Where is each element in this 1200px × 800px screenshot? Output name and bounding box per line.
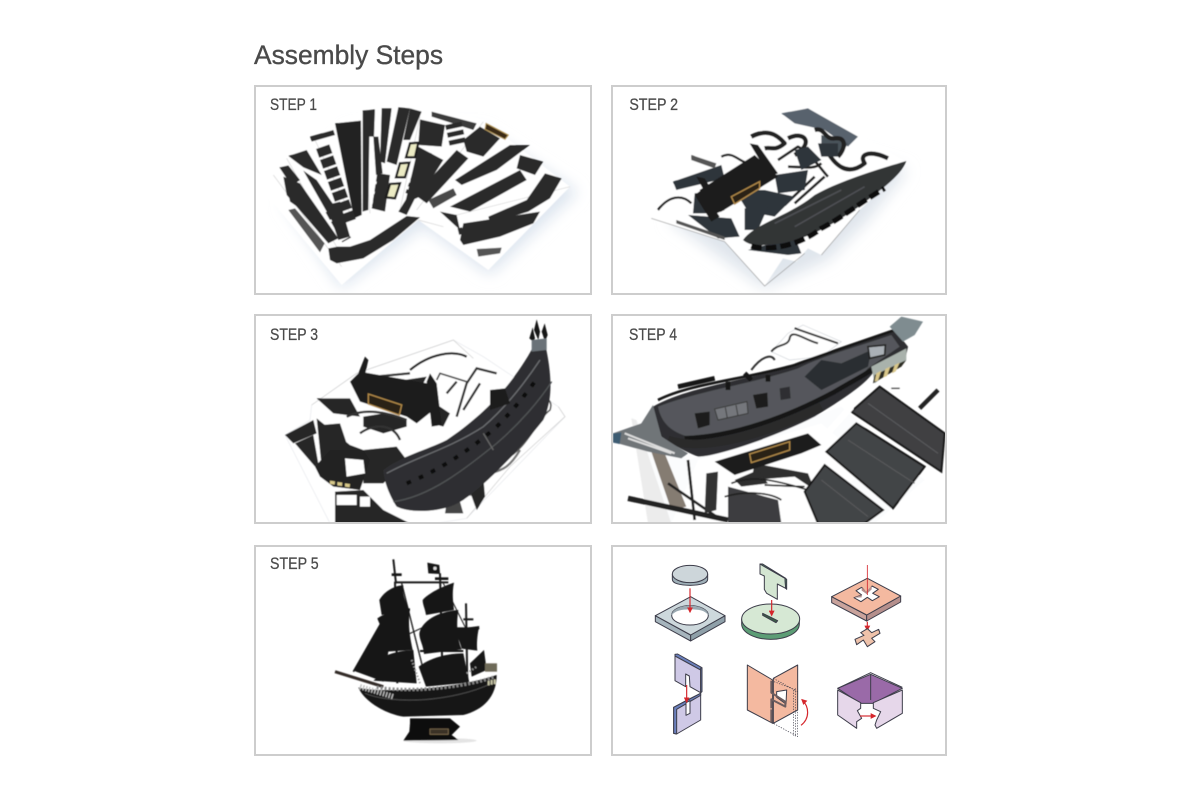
label: step 3: STEP 3	[270, 325, 318, 344]
title: Assembly Steps	[254, 40, 443, 70]
diagram: two slotted plates	[674, 654, 702, 734]
panel: slot-and-tab diagrams	[611, 545, 947, 756]
diagram: folding slotted corner	[747, 665, 808, 737]
label: step 1: STEP 1	[270, 95, 317, 114]
label: step 2: STEP 2	[629, 95, 678, 114]
panel: step 4	[611, 314, 947, 524]
photo: hull with sails	[613, 317, 945, 523]
photo: fanned sheets of parts	[267, 107, 578, 288]
panel: step 2	[611, 85, 947, 295]
photo: finished ship	[334, 558, 498, 744]
diagram: slotted box corner	[838, 673, 902, 728]
photo: hull side and base on sheets	[651, 108, 908, 288]
photo: half-built hull	[285, 319, 565, 523]
panel: step 3	[254, 314, 592, 524]
panel: step 1	[254, 85, 592, 295]
panel: step 5	[254, 545, 592, 756]
label: step 5: STEP 5	[270, 554, 319, 573]
diagram: cross into cross-shaped hole	[832, 565, 901, 647]
diagram: T tab into disc slot	[742, 564, 800, 639]
label: step 4: STEP 4	[629, 325, 677, 344]
diagram: disc into round hole	[655, 565, 725, 641]
